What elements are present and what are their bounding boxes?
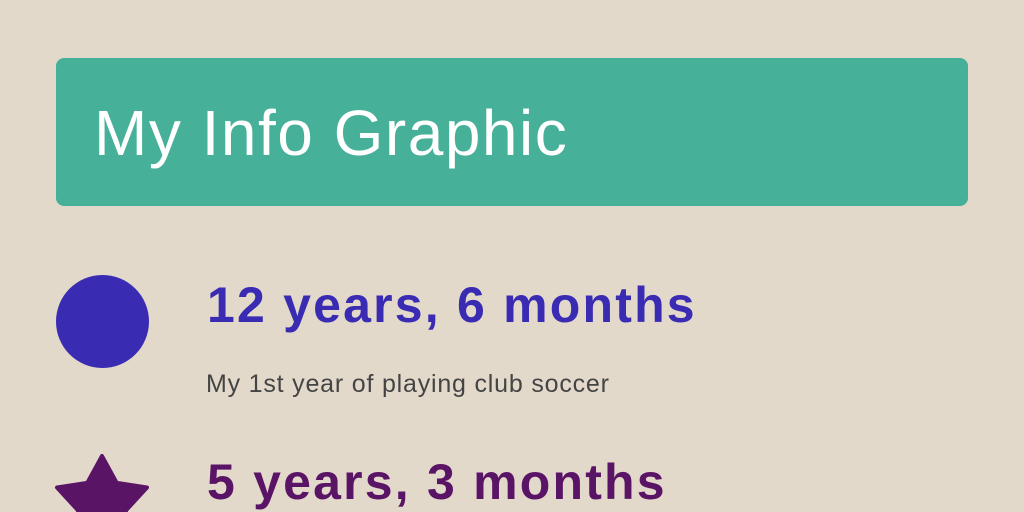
heading: 12 years, 6 months: 12 years, 6 months	[207, 277, 697, 333]
icon: blue circle	[56, 275, 149, 368]
header banner	[56, 58, 968, 206]
title: My Info Graphic	[94, 97, 568, 169]
icon: purple star	[54, 454, 149, 512]
text: description: My 1st year of playing club soccer	[206, 370, 610, 398]
